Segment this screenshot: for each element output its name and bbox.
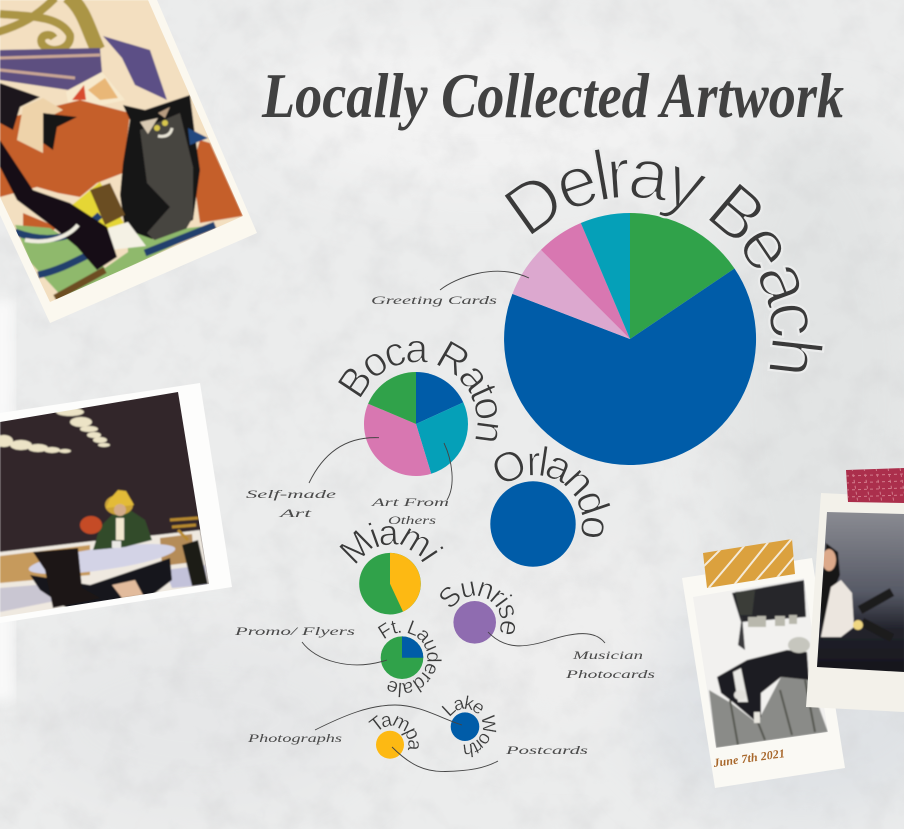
panel: Delray Beach pie chart <box>504 150 825 465</box>
city label: Sunrise: Sunrise <box>440 582 515 634</box>
callout: Musician Photocards <box>488 632 656 681</box>
callout: Musician Photocards: Musician <box>571 648 643 662</box>
callout: Self-made Art: Self-made <box>246 487 337 501</box>
tape: red washi <box>846 468 904 503</box>
city label: Orlando: Orlando <box>494 446 610 537</box>
callout: Photographs: Photographs <box>246 731 342 745</box>
caption: date: June 7th 2021 <box>711 746 786 770</box>
city label: Ft. Lauderdale: Ft. Lauderdale <box>378 620 442 698</box>
callout: Art From Others: Art From <box>370 495 450 509</box>
callout: Self-made Art: Art <box>278 506 312 520</box>
callout: Promo/ Flyers <box>233 624 387 665</box>
panel: Tampa pie chart <box>368 715 419 759</box>
callout: Greeting Cards: Greeting Cards <box>371 293 498 307</box>
city label: Tampa: Tampa <box>368 715 419 750</box>
city label: Lake Worth: Lake Worth <box>442 695 496 758</box>
photo: dog polaroid <box>682 535 845 788</box>
callout: Self-made Art <box>246 438 379 520</box>
photo: child polaroid <box>806 468 904 712</box>
callout: Photographs <box>246 705 462 745</box>
panel: Boca Raton pie chart <box>338 341 498 476</box>
panel: Sunrise pie chart <box>440 582 515 644</box>
photo: Automat painting <box>0 383 232 625</box>
city label: Delray Beach: Delray Beach <box>504 150 825 374</box>
callout: Art From Others <box>370 443 452 527</box>
panel: Miami pie chart <box>340 522 444 614</box>
callout: Postcards: Postcards <box>504 743 589 757</box>
callout: Greeting Cards <box>371 271 529 307</box>
panel: Ft. Lauderdale pie chart <box>378 620 442 698</box>
callout: Musician Photocards: Photocards <box>564 667 656 681</box>
photo: geisha and cat print <box>0 0 260 323</box>
callout: Art From Others: Others <box>388 513 436 527</box>
tape: gold washi <box>703 539 795 588</box>
callout: Promo/ Flyers: Promo/ Flyers <box>233 624 356 638</box>
callout: Postcards <box>392 743 589 772</box>
city label: Miami: Miami <box>340 522 444 564</box>
panel: Lake Worth pie chart <box>442 695 496 758</box>
panel: Orlando pie chart <box>490 446 610 567</box>
city label: Boca Raton: Boca Raton <box>338 341 498 441</box>
